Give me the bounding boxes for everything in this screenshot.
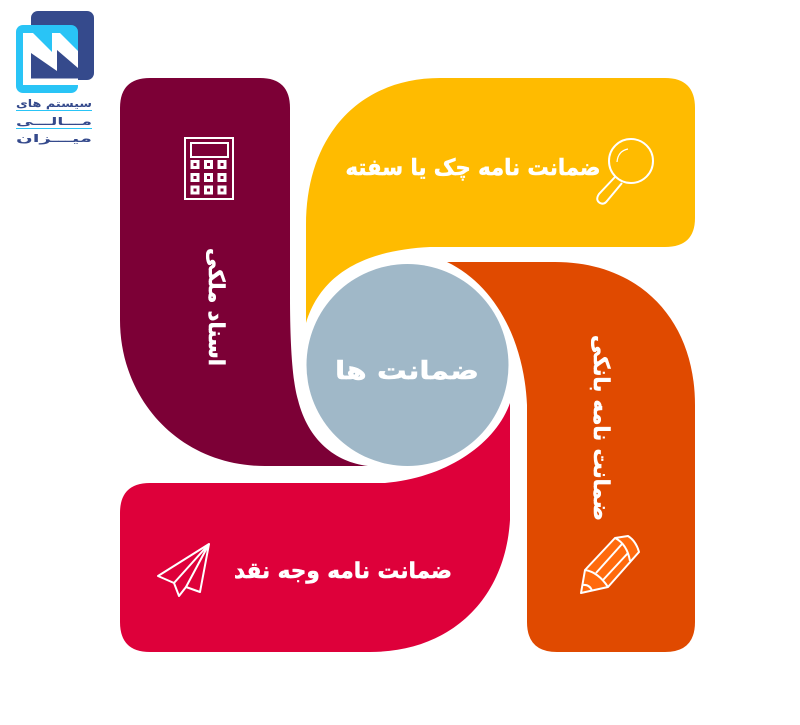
icon: magnifier xyxy=(597,139,653,204)
logo wordmark: مـــالـــی xyxy=(16,116,92,128)
heading: guarantees: ضمانت ها xyxy=(335,356,479,385)
icon: paper plane xyxy=(158,544,209,596)
logo xyxy=(16,11,94,145)
logo wordmark: میـــزان xyxy=(16,133,92,145)
heading: property documents: اسناد ملکی xyxy=(203,248,228,366)
heading: bank guarantee: ضمانت نامه بانکی xyxy=(588,335,613,521)
logo mark xyxy=(16,11,94,93)
logo wordmark: سیستم های xyxy=(16,98,92,110)
panel: orange bank guarantee xyxy=(447,262,695,652)
icon: pencil xyxy=(581,536,639,593)
logo wordmark xyxy=(16,98,92,145)
icon: calculator xyxy=(185,138,233,199)
heading: cheque guarantee: ضمانت نامه چک یا سفته xyxy=(346,155,600,181)
heading: cash guarantee: ضمانت نامه وجه نقد xyxy=(234,559,452,584)
panel: red cash guarantee xyxy=(120,403,510,652)
panel: maroon property documents xyxy=(120,78,368,466)
centre circle xyxy=(306,264,508,466)
panel: yellow cheque guarantee xyxy=(306,78,695,323)
